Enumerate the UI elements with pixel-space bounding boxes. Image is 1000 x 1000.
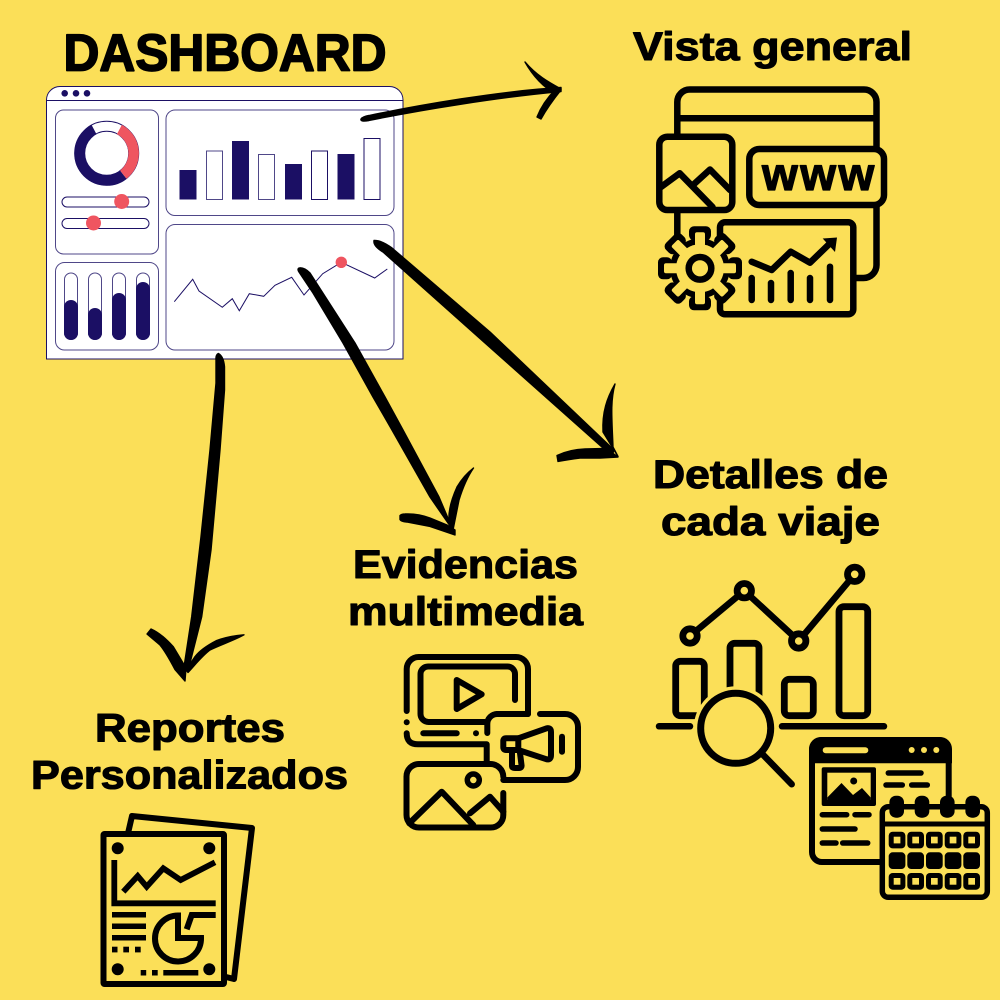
image card [659,137,732,210]
browser outline [677,90,876,278]
back page [128,816,252,979]
phone with megaphone [487,714,578,780]
heading: Evidencias multimedia: Evidencias [353,543,578,587]
arrow: dashboard to Vista general [361,62,561,121]
window header bar [46,90,403,100]
arrow: dashboard to Reportes Personalizados [147,354,244,681]
heading: Reportes Personalizados: Reportes [95,706,285,750]
panel: dashboard window [46,86,403,359]
icon: report document [104,816,252,984]
text lines and pie chart [112,915,216,973]
icon: website overview [658,90,884,314]
magnifier [659,686,884,784]
heading: Reportes Personalizados [31,706,348,798]
arrow: dashboard to Detalles de cada viaje [374,240,618,462]
heading: Evidencias multimedia: multimedia [348,590,584,634]
calendar [882,796,987,897]
photo card [406,764,503,828]
icon: multimedia [404,657,578,828]
heading: Detalles de cada viaje: Detalles de [653,453,888,497]
panel: bar chart [166,110,394,216]
panel: line chart [166,224,394,350]
trend line [683,567,862,648]
heading: Reportes Personalizados: Personalizados [31,754,348,798]
gear [658,226,742,310]
icon: analysis chart with magnifier [659,567,987,897]
article window [809,737,952,862]
small squares [112,947,158,976]
window frame [46,86,403,359]
corner holes [112,842,215,975]
monitor with play button [404,657,528,762]
heading: Vista general: Vista general [633,25,912,69]
panel: vertical gauges [56,262,158,350]
title: DASHBOARD: DASHBOARD [64,24,386,82]
heading: Evidencias multimedia [348,543,584,634]
analytics card [720,222,853,314]
heading: Detalles de cada viaje: cada viaje [661,500,880,544]
front page [104,834,224,984]
arrow: dashboard to Evidencias multimedia [298,268,474,535]
heading: Detalles de cada viaje [653,453,888,544]
panel: donut and sliders [56,110,158,254]
bars [676,607,868,716]
www box: www [761,148,877,200]
line chart [114,860,216,903]
